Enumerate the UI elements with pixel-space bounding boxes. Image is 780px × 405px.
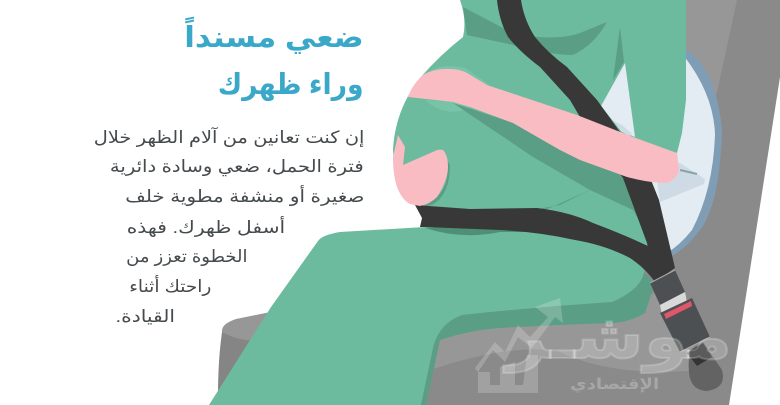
body text: إن كنت تعانين من آلام الظهر خلال [93,128,364,147]
seat belt buckle [650,270,723,391]
dress shadows [463,7,607,55]
shoulder seat belt [497,0,675,282]
lap seat belt [415,205,660,285]
round back cushion [600,47,722,258]
pink arm [408,69,679,183]
text: الخطوة تعزز من [127,247,248,266]
pink hand [393,135,448,206]
watermark logo [475,298,563,393]
green dress body [209,0,686,405]
cushion wedge beside sleeve [601,63,635,137]
text: أسفل ظهرك. فهذه [127,218,285,237]
text: صغيرة أو منشفة مطوية خلف [125,187,364,206]
text: فترة الحمل، ضعي وسادة دائرية [110,157,364,176]
seat cushion [218,290,700,395]
watermark subtitle: الإقتصادي [570,376,659,393]
watermark wordmark: موشـر [506,303,732,372]
belly highlight [423,66,490,112]
text: القيادة. [115,307,175,326]
heading: ضعي مسنداً [184,22,364,54]
text: وراء ظهرك [218,69,364,101]
text: راحتك أثناء [129,277,211,296]
car seat back [415,0,780,405]
